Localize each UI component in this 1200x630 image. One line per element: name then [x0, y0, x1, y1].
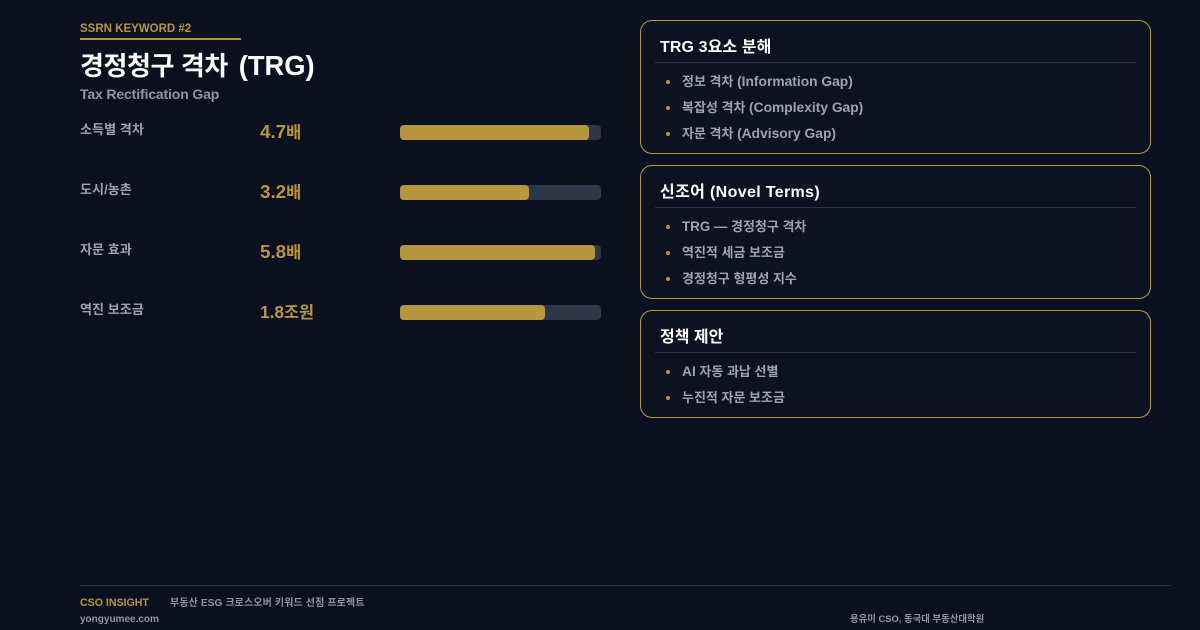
panel: novel terms: 경정청구 형평성 지수: [682, 271, 797, 286]
panel: novel terms: 신조어 (Novel Terms): [660, 184, 820, 201]
panel: TRG 3 elements: 정보 격차 (Information Gap): [682, 74, 853, 89]
panel: novel terms: [640, 165, 1151, 299]
panel: TRG 3 elements: 자문 격차 (Advisory Gap): [682, 126, 836, 141]
metric row: reverse subsidy: [80, 302, 601, 322]
panel: novel terms: 역진적 세금 보조금: [682, 245, 785, 260]
eyebrow label: SSRN KEYWORD #2: [80, 23, 191, 35]
panel: policy proposals: 정책 제안: [660, 329, 723, 346]
panel: TRG 3 elements: [640, 20, 1151, 154]
title: 경정청구 격차 (TRG): [80, 50, 315, 81]
footer divider: [80, 585, 1171, 586]
metric row: urban rural: 도시/농촌: [80, 182, 132, 197]
eyebrow underline: [80, 38, 241, 40]
footer website: yongyumee.com: [80, 614, 159, 625]
footer project name: 부동산 ESG 크로스오버 키워드 선점 프로젝트: [170, 598, 365, 609]
metric row: income gap: [80, 121, 601, 142]
panel: policy proposals: 누진적 자문 보조금: [682, 390, 785, 405]
metric row: urban rural: [80, 181, 601, 202]
panel: TRG 3 elements: 복잡성 격차 (Complexity Gap): [682, 100, 863, 115]
metric row: income gap: 소득별 격차: [80, 122, 144, 137]
panel: TRG 3 elements: TRG 3요소 분해: [660, 39, 771, 56]
metric row: advisory effect: 5.8배: [260, 241, 301, 262]
metric row: reverse subsidy: 역진 보조금: [80, 302, 144, 317]
panel: policy proposals: AI 자동 과납 선별: [682, 364, 778, 379]
metric row: reverse subsidy: 1.8조원: [260, 302, 314, 322]
footer brand: CSO INSIGHT: [80, 597, 149, 609]
metric row: advisory effect: [80, 241, 601, 262]
metric row: urban rural: 3.2배: [260, 181, 301, 202]
footer author: 용유미 CSO, 동국대 부동산대학원: [850, 613, 984, 624]
subtitle: Tax Rectification Gap: [80, 86, 219, 102]
panel: policy proposals: [640, 310, 1151, 418]
panel: novel terms: TRG — 경정청구 격차: [682, 219, 806, 234]
metric row: advisory effect: 자문 효과: [80, 242, 132, 257]
metric row: income gap: 4.7배: [260, 121, 301, 142]
